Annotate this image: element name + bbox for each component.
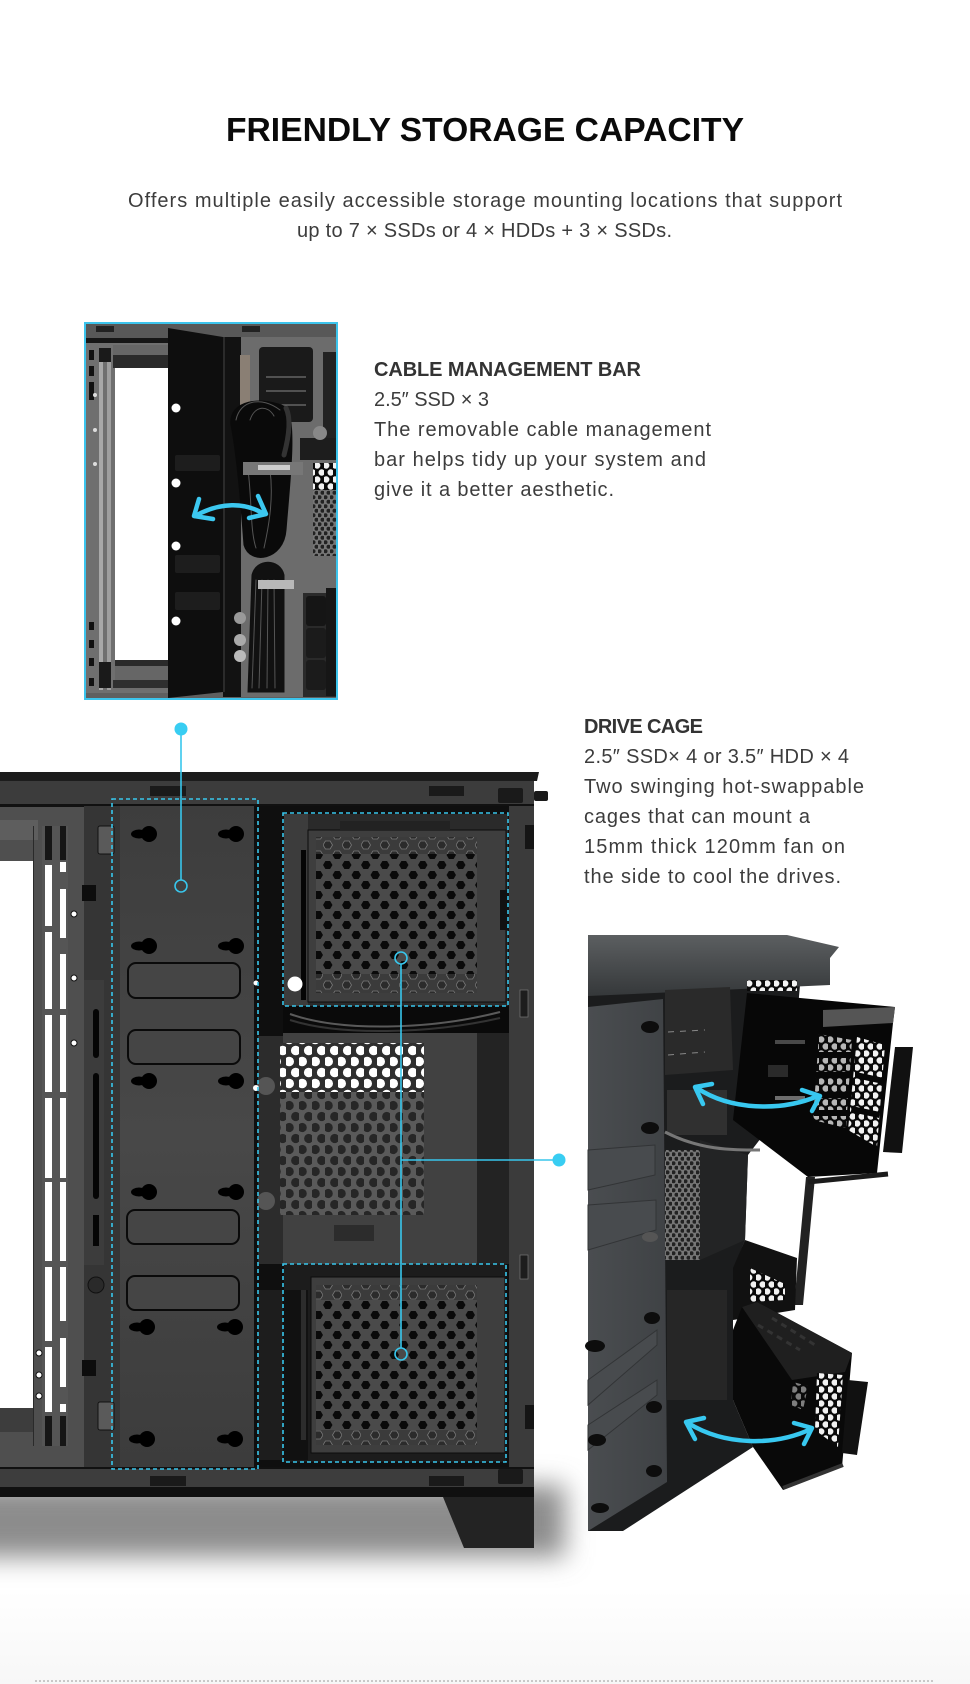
upper swung drive cage bbox=[733, 993, 895, 1182]
text: drive cage: the side to cool the drives. bbox=[584, 866, 841, 888]
text: cable management bar: 2.5″ SSD × 3 bbox=[374, 389, 489, 411]
text: cable management bar: give it a better aesthetic. bbox=[374, 479, 614, 501]
swing arrow bbox=[194, 496, 266, 519]
text: cable management bar: CABLE MANAGEMENT BAR bbox=[374, 359, 642, 381]
frame latch strip bbox=[82, 806, 120, 1467]
middle vent mesh bbox=[280, 1043, 424, 1215]
left frame bbox=[86, 343, 168, 693]
swing arrow top bbox=[695, 1084, 820, 1111]
swung-out black bar bbox=[168, 328, 224, 698]
intro text: up to 7 × SSDs or 4 × HDDs + 3 × SSDs. bbox=[297, 220, 672, 242]
callout: drive cage connector bbox=[395, 952, 566, 1360]
title: FRIENDLY STORAGE CAPACITY bbox=[226, 111, 744, 148]
panel: drive cage photo bbox=[585, 935, 913, 1531]
intro text: Offers multiple easily accessible storage mounting locations that support bbox=[128, 190, 842, 212]
footer dashed divider bbox=[35, 1680, 935, 1682]
lower back mesh bbox=[733, 1240, 797, 1320]
case floor shadow bbox=[0, 1485, 565, 1557]
window opening bbox=[115, 368, 168, 660]
bay rear wall bbox=[700, 1140, 748, 1260]
callout: cable management bar connector bbox=[174, 722, 188, 892]
cables bbox=[231, 401, 292, 692]
upper drive cage bbox=[284, 814, 508, 1006]
case top lid bbox=[588, 935, 839, 996]
text: cable management bar: bar helps tidy up your system and bbox=[374, 449, 706, 471]
vertical hinge strut bbox=[794, 1177, 815, 1305]
top vent holes bbox=[747, 980, 797, 991]
dashed highlight: lower drive cage bbox=[283, 1264, 506, 1462]
text: drive cage: cages that can mount a bbox=[584, 806, 811, 828]
recessed slots bbox=[127, 963, 240, 1310]
upper cage handle bbox=[883, 1047, 913, 1153]
right frame hinges bbox=[509, 806, 534, 1467]
case foot bbox=[443, 1497, 534, 1548]
keyholes bbox=[129, 826, 244, 1447]
interior bbox=[588, 985, 800, 1531]
cable management panel bbox=[120, 806, 254, 1467]
panel: cable management bar photo bbox=[85, 323, 337, 699]
left frame with window bbox=[0, 807, 84, 1467]
text: drive cage: 2.5″ SSD× 4 or 3.5″ HDD × 4 bbox=[584, 746, 849, 768]
bottom edge bbox=[0, 1467, 534, 1497]
photo border bbox=[85, 323, 337, 699]
vent slots bbox=[45, 862, 66, 1412]
text: cable management bar bbox=[374, 359, 711, 501]
main case front view bbox=[0, 772, 548, 1548]
intro text bbox=[128, 190, 842, 242]
page background bbox=[0, 1590, 970, 1684]
text: drive cage: 15mm thick 120mm fan on bbox=[584, 836, 845, 858]
lower cage handle bbox=[842, 1380, 868, 1455]
text: drive cage: DRIVE CAGE bbox=[584, 716, 703, 738]
frame rivets bbox=[36, 911, 77, 1399]
side panel bbox=[585, 999, 667, 1531]
text: drive cage: Two swinging hot-swappable bbox=[584, 776, 864, 798]
lower swung drive cage bbox=[733, 1302, 852, 1490]
interior bay bbox=[253, 806, 509, 1467]
cable clamps bbox=[243, 462, 303, 589]
text: cable management bar: The removable cable management bbox=[374, 419, 711, 441]
case outer body bbox=[0, 772, 534, 1497]
swing arrow bottom bbox=[686, 1418, 812, 1444]
cables band bbox=[283, 1006, 509, 1033]
vent mesh in photo bbox=[313, 463, 336, 556]
dashed highlight: upper drive cage bbox=[283, 813, 508, 1006]
interior panel bbox=[223, 337, 337, 697]
top edge bbox=[0, 772, 539, 807]
top connectors bbox=[150, 786, 548, 803]
top rail of photo bbox=[86, 324, 336, 343]
lower drive cage bbox=[284, 1264, 506, 1462]
text: drive cage bbox=[584, 716, 864, 888]
dashed highlight: cable management panel bbox=[112, 799, 258, 1469]
drive bays stack bbox=[665, 987, 760, 1400]
